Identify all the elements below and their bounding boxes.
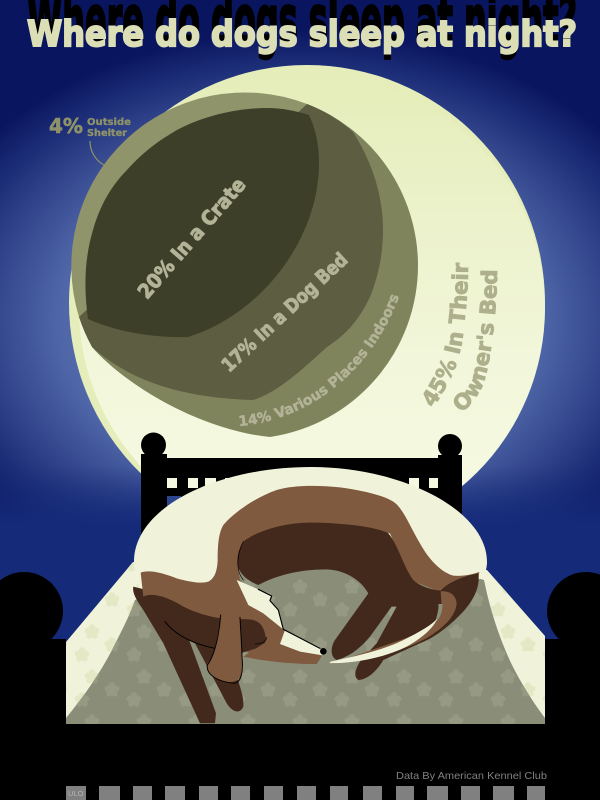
- sleeping dog: [133, 486, 479, 723]
- bedspread: [66, 555, 545, 724]
- dog muzzle: [280, 630, 322, 655]
- label: 20% in a crate: 20% In a Crate: [133, 173, 250, 303]
- dog far legs: [133, 587, 243, 723]
- disc slice: 14% various places indoors: [92, 104, 418, 437]
- headboard: [141, 432, 462, 545]
- dog outline strokes: [165, 542, 320, 683]
- grey quilt: [66, 555, 545, 724]
- label: 45% in their owner's bed: [424, 262, 498, 410]
- dog body: [141, 486, 479, 664]
- callout: 4% outside shelter: Outside: [87, 117, 131, 128]
- callout: 4% outside shelter: 4%: [49, 114, 83, 138]
- label: 45% in their owner's bed: Owner's Bed: [454, 270, 498, 410]
- footer squares: [66, 786, 545, 800]
- callout: 4% outside shelter: [49, 114, 131, 165]
- moon edge: [69, 65, 545, 541]
- footer squares: ULO: [68, 789, 84, 798]
- moon pie chart: [69, 65, 545, 486]
- slice: 20% in a crate: [85, 108, 319, 337]
- callout: 4% outside shelter: Shelter: [87, 128, 127, 139]
- slice: 17% in a dog bed: [79, 104, 383, 400]
- dog upper foreleg: [143, 595, 266, 657]
- dog head: [243, 643, 322, 664]
- dog neck fur: [237, 580, 284, 630]
- dog nose: [320, 648, 327, 655]
- slice: 4% outside shelter: [71, 92, 320, 340]
- bed frame: [0, 572, 600, 800]
- label: 14% various places indoors: 14% Various Places Indoors: [239, 294, 398, 426]
- title: [27, 0, 577, 60]
- dog tail: [331, 591, 457, 664]
- label: 17% in a dog bed: 17% In a Dog Bed: [217, 249, 352, 377]
- dog ear: [207, 615, 242, 682]
- source credit: Data By American Kennel Club: [396, 770, 547, 782]
- label: 45% in their owner's bed: 45% In Their: [424, 262, 468, 406]
- dog belly and hind legs: [237, 523, 479, 680]
- moon slice: 45% in their owner's bed: [79, 75, 545, 541]
- light quilt: [66, 562, 545, 724]
- pillow: [134, 467, 487, 590]
